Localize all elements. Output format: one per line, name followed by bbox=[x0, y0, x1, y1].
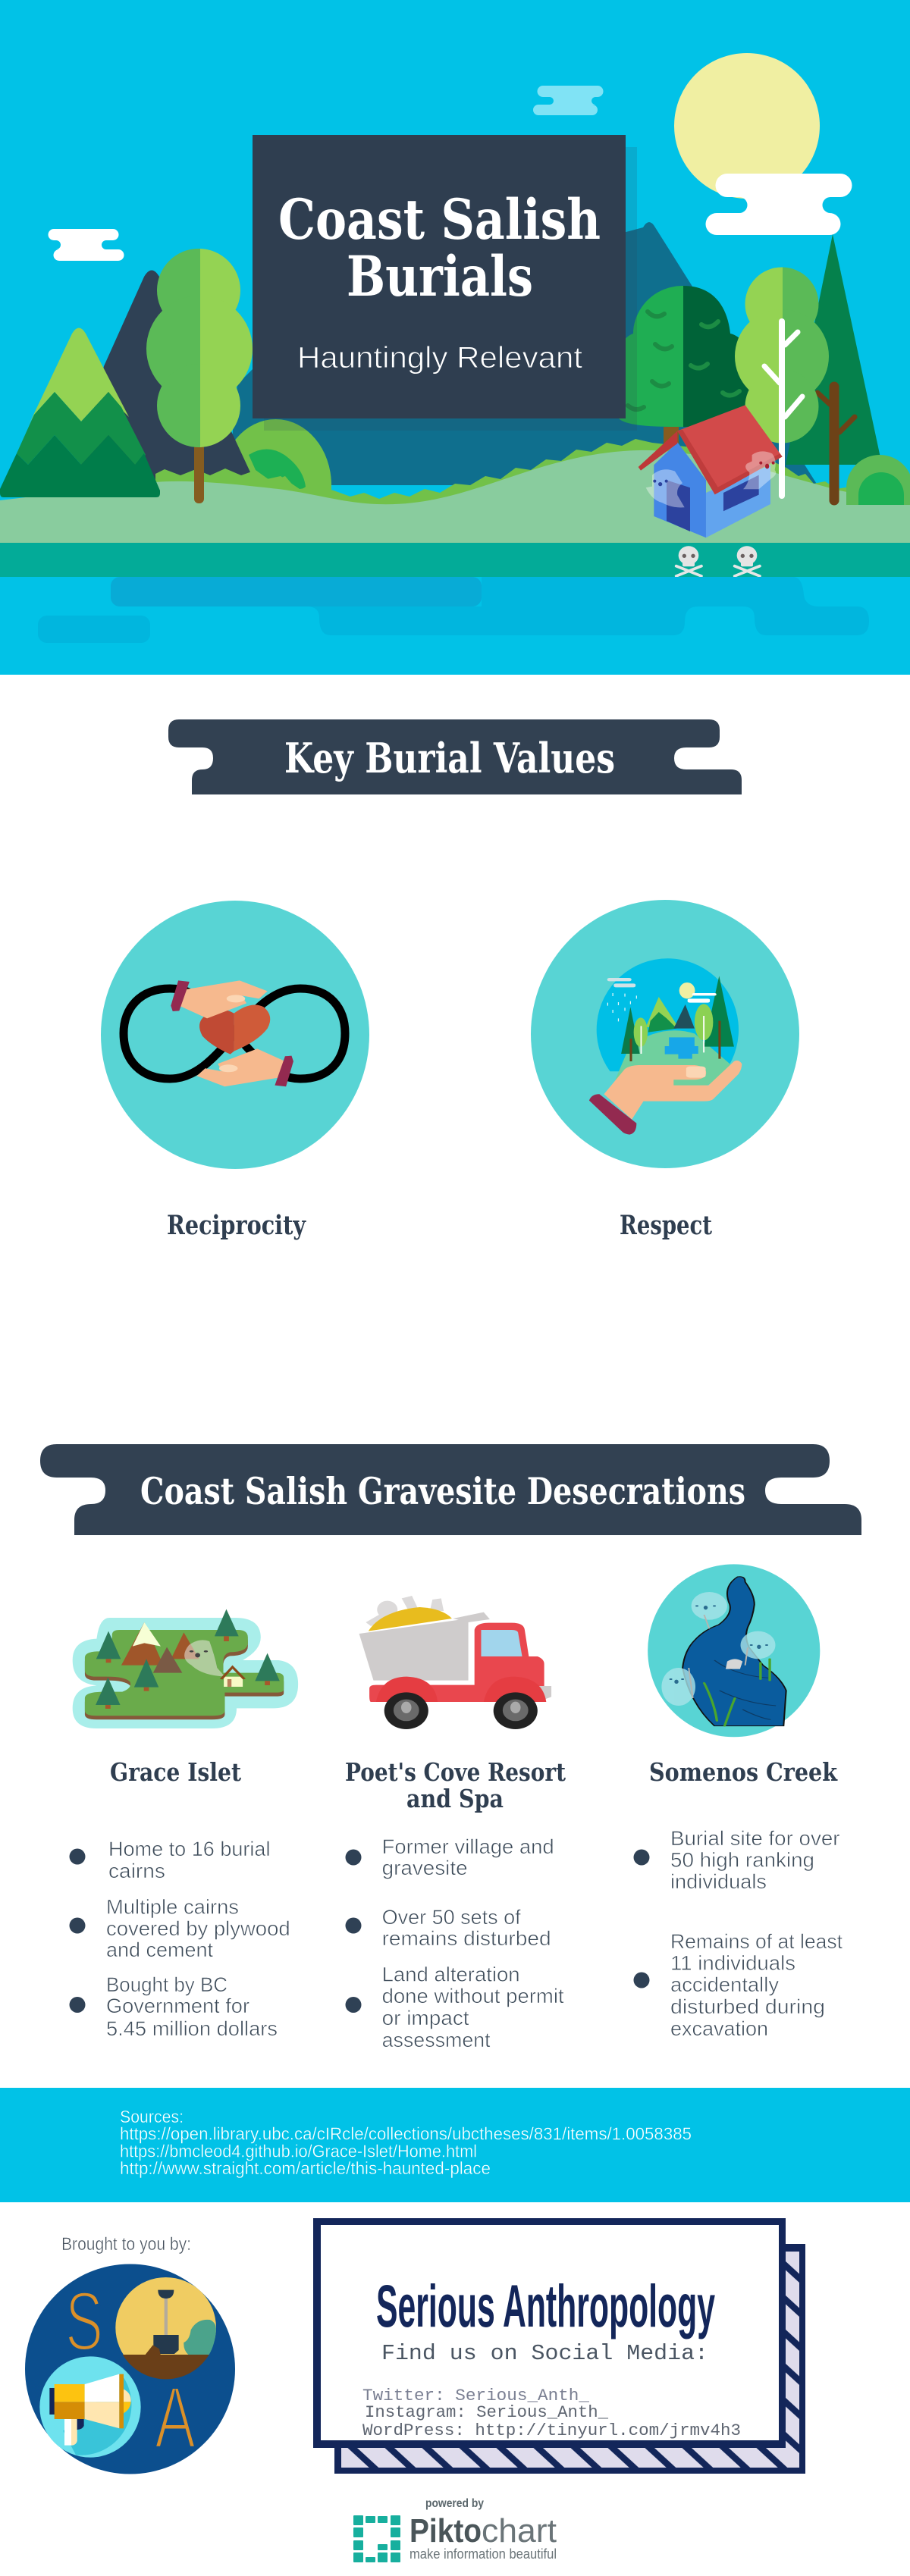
bullet list: remains disturbed bbox=[382, 1927, 551, 1950]
title panel bbox=[253, 135, 626, 418]
bullet list: Remains of at least bbox=[670, 1930, 843, 1953]
bullet list: excavation bbox=[670, 2017, 768, 2040]
icon: infinity bbox=[124, 989, 345, 1079]
tree: large dark green bbox=[610, 286, 758, 451]
piktochart footer: chart bbox=[482, 2512, 557, 2549]
bullet list: Land alteration bbox=[382, 1963, 520, 1986]
piktochart footer bbox=[353, 2497, 557, 2562]
bullet list: accidentally bbox=[670, 1973, 780, 1996]
sources band: https://open.library.ubc.ca/cIRcle/collections/ubctheses/831/items/1.0058385 bbox=[120, 2123, 692, 2143]
letter S: S bbox=[65, 2275, 103, 2368]
bullet list: 5.45 million dollars bbox=[106, 2017, 278, 2040]
ghost: left bbox=[646, 469, 685, 508]
bullet list: Former village and bbox=[382, 1835, 554, 1858]
column: poet's cove bbox=[345, 1596, 566, 2051]
river bbox=[682, 1577, 786, 1726]
cloud: small white bbox=[49, 229, 124, 261]
icon: megaphone bbox=[39, 2356, 141, 2458]
title: Coast Salish bbox=[278, 187, 601, 252]
front frame bbox=[313, 2218, 786, 2448]
card subtitle: Find us on Social Media: bbox=[381, 2341, 708, 2366]
piktochart footer: make information beautiful bbox=[410, 2546, 557, 2562]
tree: tall green cone bbox=[786, 234, 882, 465]
banner: gravesite desecrations bbox=[40, 1444, 861, 1535]
ghost bbox=[184, 1640, 224, 1677]
circle bbox=[531, 900, 799, 1168]
bullet list: Home to 16 burial bbox=[108, 1838, 270, 1860]
column: somenos creek bbox=[634, 1564, 843, 2040]
back striped frame bbox=[334, 2244, 805, 2474]
circle bbox=[101, 901, 369, 1169]
bullet list: Burial site for over bbox=[670, 1827, 840, 1850]
skulls bbox=[676, 546, 760, 576]
social handles: Twitter: Serious_Anth_ bbox=[362, 2386, 589, 2405]
social card: Instagram: Serious_Anth_ bbox=[365, 2402, 608, 2422]
bullet list: or impact bbox=[382, 2007, 469, 2029]
mountain: blue behind title bbox=[228, 222, 817, 485]
bullet list: Multiple cairns bbox=[106, 1895, 239, 1918]
subtitle: Hauntingly Relevant bbox=[297, 341, 582, 374]
piktochart footer: powered by bbox=[425, 2497, 484, 2510]
sun bbox=[674, 53, 820, 199]
column: grace islet bbox=[70, 1609, 298, 2040]
heading: Poet's Cove Resort bbox=[345, 1757, 566, 1787]
label: Reciprocity bbox=[167, 1210, 306, 1241]
bullet list: 50 high ranking bbox=[670, 1848, 814, 1871]
bullet list: Over 50 sets of bbox=[382, 1906, 521, 1929]
sources band: Sources: bbox=[120, 2107, 184, 2126]
bullet list bbox=[346, 1835, 564, 2051]
house bbox=[224, 1677, 243, 1687]
ghost: right bbox=[743, 451, 776, 489]
door bbox=[667, 480, 690, 531]
bullet list: disturbed during bbox=[670, 1995, 825, 2018]
tree: right rounded bbox=[735, 267, 829, 443]
social card: WordPress: http://tinyurl.com/jrmv4h3 bbox=[362, 2421, 741, 2440]
bullet list: covered by plywood bbox=[106, 1917, 290, 1940]
bullet list: Bought by BC bbox=[106, 1973, 228, 1996]
icon: hands and heart bbox=[171, 980, 293, 1086]
bullet list bbox=[634, 1827, 843, 2040]
icon: shovel bbox=[115, 2277, 216, 2379]
mountain: green front bbox=[0, 327, 160, 497]
sources band bbox=[0, 2088, 910, 2202]
logo grid bbox=[353, 2515, 400, 2562]
logo: serious anthropology bbox=[25, 2264, 235, 2474]
bullet list: done without permit bbox=[382, 1985, 564, 2007]
grass strip bbox=[155, 439, 910, 531]
bones bbox=[366, 1596, 444, 1626]
ghosts bbox=[661, 1592, 775, 1706]
letter A: A bbox=[155, 2368, 196, 2467]
tree: brown bare bbox=[817, 387, 855, 500]
bush: right bbox=[846, 455, 910, 505]
bullet list: Government for bbox=[106, 1995, 249, 2017]
bush: left bbox=[220, 419, 331, 508]
cloud: pale blue bbox=[533, 86, 604, 115]
banner: key burial values: Key Burial Values bbox=[284, 734, 615, 782]
title shadow bbox=[264, 147, 637, 431]
banner: gravesite desecrations: Coast Salish Gravesite Desecrations bbox=[140, 1469, 745, 1513]
roof bbox=[639, 431, 677, 471]
icon: hand holding landscape bbox=[589, 958, 742, 1135]
label: Respect bbox=[620, 1210, 712, 1241]
value: reciprocity bbox=[101, 901, 369, 1241]
column: poet's cove: and Spa bbox=[406, 1784, 504, 1813]
banner: key burial values bbox=[168, 719, 742, 794]
title panel: Burials bbox=[347, 244, 533, 309]
value: respect bbox=[531, 900, 799, 1241]
heading: Grace Islet bbox=[110, 1757, 242, 1787]
icon: island bbox=[73, 1609, 298, 1728]
icon: creek circle bbox=[648, 1564, 820, 1737]
sources band: http://www.straight.com/article/this-haunted-place bbox=[120, 2158, 491, 2178]
tree: white birch bbox=[764, 321, 802, 496]
bullet list: individuals bbox=[670, 1870, 767, 1893]
bullet list: 11 individuals bbox=[670, 1951, 795, 1974]
social card bbox=[313, 2218, 805, 2474]
hero scene bbox=[0, 0, 910, 675]
water ripples bbox=[38, 577, 869, 643]
teal shore band bbox=[0, 543, 910, 577]
sources band: https://bmcleod4.github.io/Grace-Islet/Home.html bbox=[120, 2142, 477, 2161]
bullet list bbox=[70, 1838, 290, 2040]
cloud: large white bbox=[706, 174, 852, 235]
mountain: dark slate bbox=[76, 270, 256, 485]
ground bbox=[0, 450, 910, 544]
bullet list: gravesite bbox=[382, 1857, 468, 1879]
tree: left rounded bbox=[146, 249, 253, 503]
window bbox=[723, 475, 759, 511]
bullet list: assessment bbox=[382, 2029, 491, 2051]
icon: dump truck bbox=[359, 1596, 551, 1729]
credit text: Brought to you by: bbox=[61, 2234, 191, 2255]
piktochart footer: Pikto bbox=[410, 2512, 482, 2549]
haunted house bbox=[639, 405, 783, 537]
bullet list: and cement bbox=[106, 1938, 213, 1961]
bullet list: cairns bbox=[108, 1860, 165, 1882]
heading: Somenos Creek bbox=[649, 1757, 838, 1787]
